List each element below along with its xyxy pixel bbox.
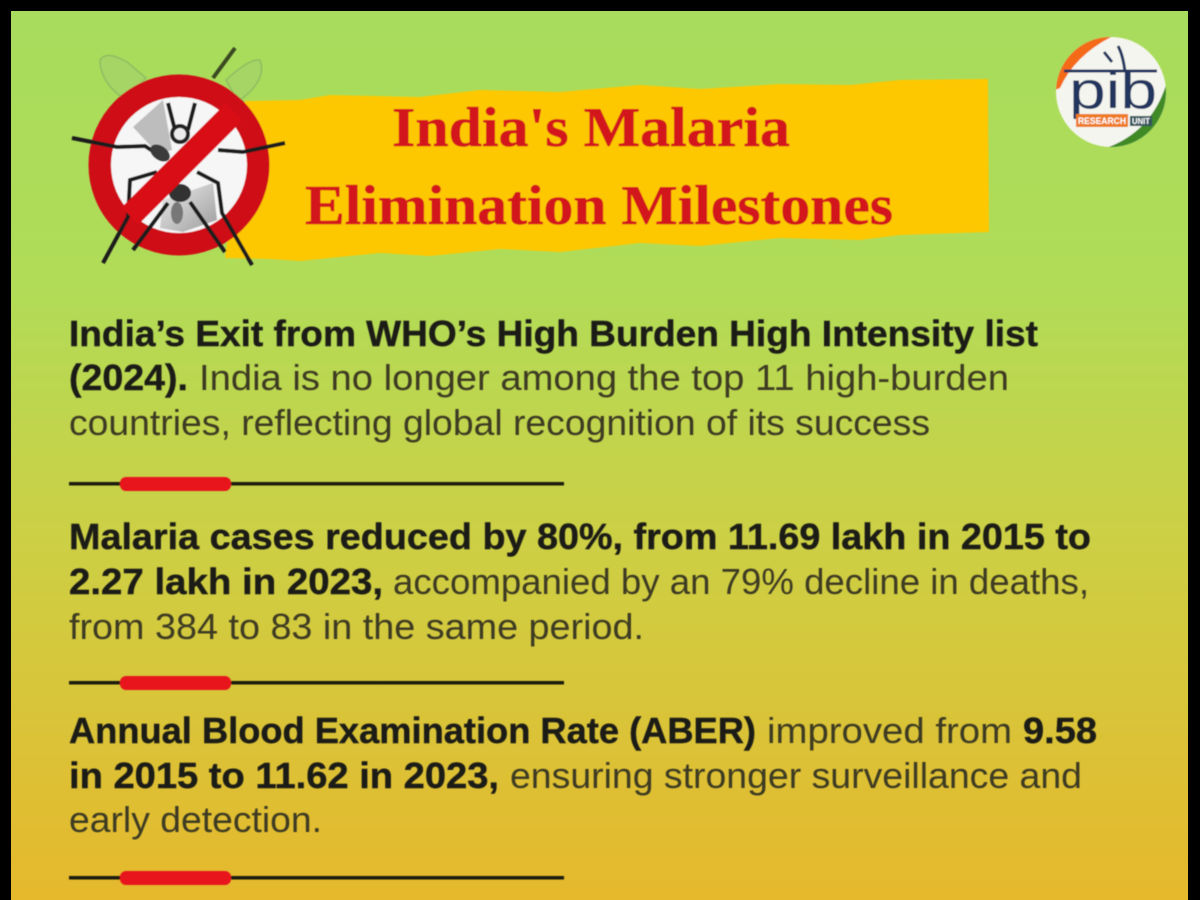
icon: PIB Research Unit logo: RESEARCH [1078, 116, 1126, 126]
text block: WHO list exit: India’s Exit from WHO’s High Burden High Intensity list [69, 313, 1038, 354]
divider 1 [69, 477, 564, 491]
text block: malaria cases reduced: 2.27 lakh in 2023, [69, 561, 383, 602]
banner: yellow brush stroke [225, 79, 989, 261]
divider 2 [69, 676, 564, 690]
title text [305, 97, 893, 237]
icon: PIB Research Unit logo: UNIT [1132, 117, 1150, 126]
text block: malaria cases reduced: from 384 to 83 in the same period. [69, 606, 644, 647]
text block: ABER improved: Annual Blood Examination Rate (ABER) [69, 710, 756, 751]
text block: ABER improved: 9.58 [1023, 710, 1097, 751]
text block: ABER improved [69, 710, 1097, 840]
text block: WHO list exit: (2024). [69, 357, 188, 398]
title text: Elimination Milestones [305, 175, 893, 237]
text block: WHO list exit: countries, reflecting global recognition of its success [69, 402, 930, 443]
text block: ABER improved: ensuring stronger surveillance and [510, 755, 1082, 796]
title banner [225, 79, 989, 261]
icon: PIB Research Unit logo: pib [1069, 62, 1157, 120]
text block: WHO list exit [69, 313, 1038, 443]
divider 3 [69, 871, 564, 885]
text block: ABER improved: in 2015 to 11.62 in 2023, [69, 755, 499, 796]
icon: PIB Research Unit logo [1050, 36, 1172, 150]
text block: malaria cases reduced: accompanied by an 79% decline in deaths, [393, 561, 1089, 602]
text block: WHO list exit: India is no longer among the top 11 high-burden [199, 357, 1009, 398]
text block: malaria cases reduced: Malaria cases reduced by 80%, from 11.69 lakh in 2015 to [69, 516, 1091, 557]
icon: crossed-out mosquito [72, 48, 285, 265]
text block: malaria cases reduced [69, 516, 1091, 647]
title text: India's Malaria [392, 97, 790, 159]
text block: ABER improved: early detection. [69, 799, 322, 840]
text block: ABER improved: improved from [767, 710, 1012, 751]
